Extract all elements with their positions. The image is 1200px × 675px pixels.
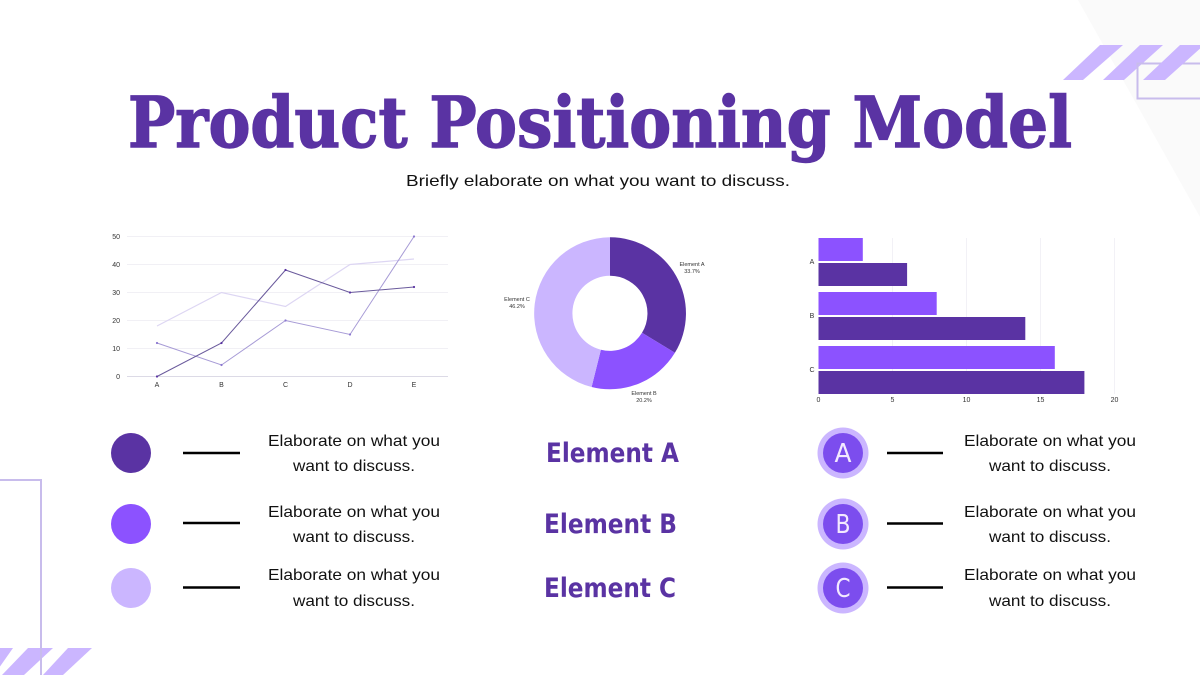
donut chart: Element B (631, 391, 657, 397)
label: Element C: Element C (544, 573, 676, 604)
badge: C: C (836, 574, 850, 604)
line chart: 0 (116, 374, 120, 381)
donut chart: Element C (504, 297, 530, 303)
line chart (112, 234, 448, 389)
bar chart: B (810, 313, 815, 320)
bar chart: 20 (1111, 397, 1118, 404)
line chart: E (412, 382, 417, 389)
text block: right row 1: Elaborate on what you (964, 433, 1136, 450)
bar chart (809, 238, 1118, 404)
bar chart: 0 (817, 397, 821, 404)
text block: right row 3: want to discuss. (988, 593, 1111, 610)
badge: A (818, 428, 868, 478)
bar chart: C (809, 367, 815, 374)
decoration: bottom left corner (0, 480, 92, 675)
text block: left row 1: Elaborate on what you (268, 433, 440, 450)
line chart: 30 (112, 290, 120, 297)
donut chart: 33.7% (684, 269, 700, 275)
subtitle: Briefly elaborate on what you want to discuss. (406, 173, 790, 190)
donut chart: Element A (679, 262, 705, 268)
legend dot: dark purple (111, 433, 151, 473)
label: Element A: Element A (546, 438, 679, 469)
bar chart: 5 (891, 397, 895, 404)
text block: left row 1 (268, 433, 440, 475)
line chart: 40 (112, 262, 120, 269)
text block: left row 2: want to discuss. (292, 529, 415, 546)
donut chart: 46.2% (509, 304, 525, 310)
text block: right row 2: Elaborate on what you (964, 504, 1136, 521)
title: Product Positioning Model (128, 81, 1072, 164)
text block: right row 1: want to discuss. (988, 458, 1111, 475)
line chart: D (347, 382, 353, 389)
line chart: 50 (112, 234, 120, 241)
label: Element B: Element B (544, 509, 677, 540)
line chart: 10 (112, 346, 120, 353)
bar chart: A (810, 259, 815, 266)
text block: right row 2 (964, 504, 1136, 546)
text block: left row 2: Elaborate on what you (268, 504, 440, 521)
donut chart: 20.2% (636, 398, 652, 404)
text block: left row 3 (268, 567, 440, 610)
text block: right row 1 (964, 433, 1136, 475)
line chart: 20 (112, 318, 120, 325)
badge: B (818, 498, 868, 550)
legend dot: medium purple (111, 504, 151, 544)
text block: left row 3: want to discuss. (292, 593, 415, 610)
text block: right row 3 (964, 567, 1136, 610)
badge: A: A (834, 439, 852, 469)
decoration: top right corner (1063, 0, 1200, 217)
text block: left row 1: want to discuss. (292, 458, 415, 475)
text block: right row 2: want to discuss. (988, 529, 1111, 546)
bar chart: 10 (963, 397, 970, 404)
text block: left row 2 (268, 504, 440, 546)
badge: B: B (836, 510, 850, 540)
text block: right row 3: Elaborate on what you (964, 567, 1136, 584)
line chart: A (155, 382, 160, 389)
connector lines: right (887, 453, 943, 588)
connector lines: left (183, 453, 240, 588)
text block: left row 3: Elaborate on what you (268, 567, 440, 584)
bar chart: 15 (1037, 397, 1044, 404)
donut chart (504, 237, 705, 404)
line chart: B (219, 382, 224, 389)
legend dot: light purple (111, 568, 151, 608)
line chart: C (283, 382, 288, 389)
badge: C (818, 562, 868, 614)
